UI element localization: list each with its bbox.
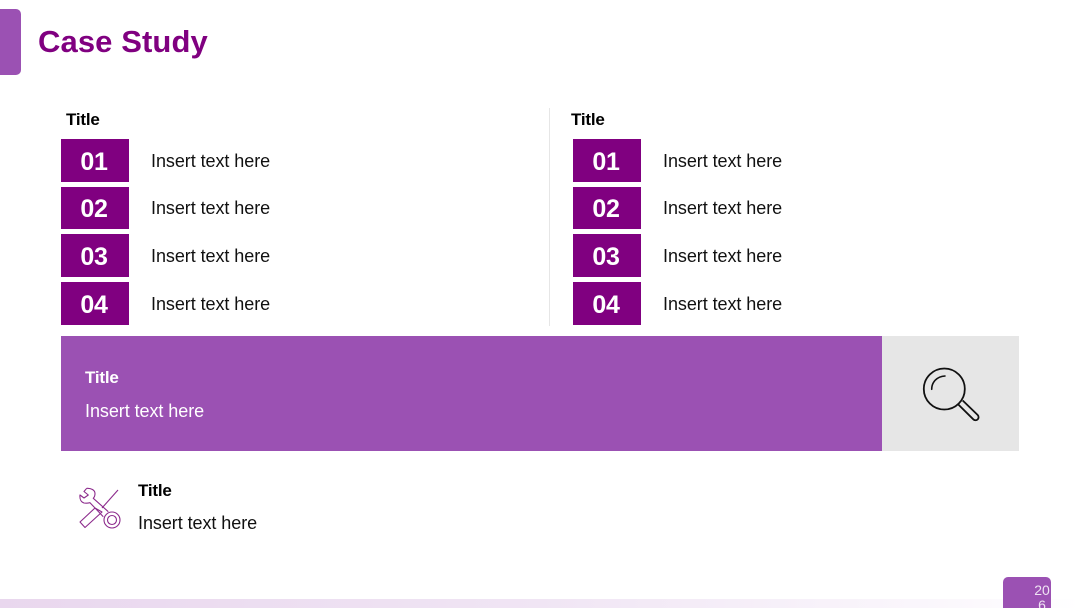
panel: right list [571,110,782,325]
item 04 number [61,282,129,325]
item 02 number: 02 [80,195,108,223]
icon: magnifying glass [922,368,980,422]
item 04 number [573,282,641,325]
item 03 text: Insert text here [663,246,782,266]
panel: icon box [882,336,1018,451]
item 03 number [61,234,129,277]
item 01 number: 01 [80,148,108,176]
banner text: Insert text here [85,401,204,421]
item 01 number [61,139,129,182]
item 03 text: Insert text here [151,246,270,266]
title: Case Study [38,24,208,59]
item 01 number [573,139,641,182]
item 04 text: Insert text here [663,294,782,314]
item 02 text: Insert text here [663,198,782,218]
tools text: Insert text here [138,513,257,533]
left list heading: Title [66,110,100,129]
item 02 text: Insert text here [151,198,270,218]
banner heading: Title [85,368,119,387]
footer gradient strip [0,599,1080,608]
item 04 text: Insert text here [151,294,270,314]
panel: highlight banner [61,336,882,451]
panel: left list [61,110,270,325]
tools heading: Title [138,481,172,500]
header accent tab [0,9,21,75]
item 01 text: Insert text here [663,151,782,171]
item 03 number: 03 [592,242,620,270]
item 02 number [61,187,129,229]
item 03 number [573,234,641,277]
right list heading: Title [571,110,605,129]
item 04 number: 04 [592,290,620,318]
item 02 number [573,187,641,229]
item 02 number: 02 [592,195,620,223]
page number badge [1003,577,1051,608]
divider [549,108,550,326]
item 01 text: Insert text here [151,151,270,171]
item 03 number: 03 [80,242,108,270]
item 01 number: 01 [592,148,620,176]
text block: tools [138,481,257,533]
item 04 number: 04 [80,290,108,318]
icon: tools [79,488,121,528]
